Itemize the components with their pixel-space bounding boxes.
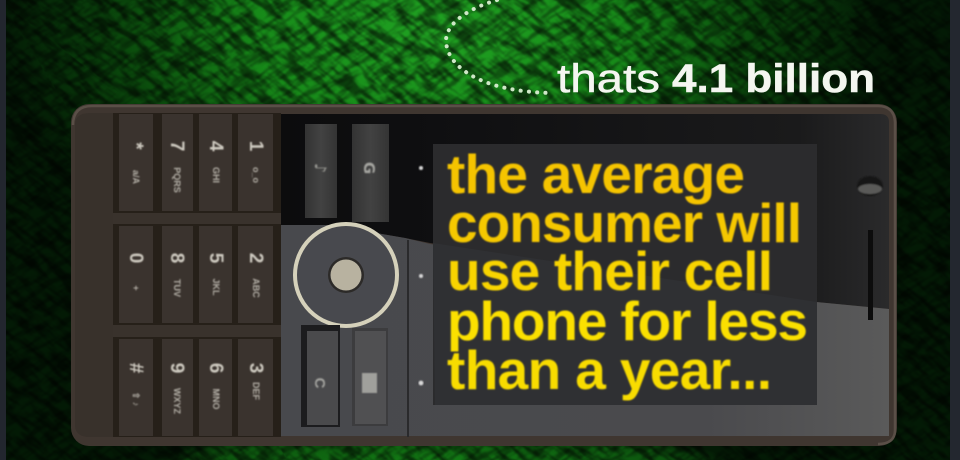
key digits: 8 (166, 253, 187, 263)
screen text: use their cell (447, 240, 773, 302)
side dots (419, 166, 423, 385)
soft key: end (352, 328, 388, 426)
key digits: 1 (245, 141, 266, 152)
key letters: ⇧ ♪ (131, 392, 141, 406)
soft key: clear (301, 325, 340, 427)
key letters: + (131, 285, 141, 291)
panel divider (407, 240, 409, 437)
key letters: PQRS (172, 167, 182, 193)
key digits (125, 141, 266, 374)
upper dark panel (281, 114, 889, 309)
key letters (131, 167, 261, 415)
keys row 1 (119, 114, 273, 211)
key digits: 5 (205, 253, 226, 264)
key letters: GHI (211, 167, 221, 183)
keys row 2 (119, 226, 273, 323)
soft key: call: ♪ (311, 163, 330, 173)
key digits: 6 (205, 363, 226, 373)
callout text: thats 4.1 billion: 4.1 billion (672, 57, 875, 101)
soft key: menu: G (360, 162, 378, 174)
soft key: clear: C (311, 378, 328, 389)
side slot (868, 230, 873, 320)
key digits: * (125, 142, 146, 150)
key digits: 4 (205, 141, 226, 152)
key digits: # (125, 363, 146, 374)
screen (433, 144, 817, 405)
key digits: 3 (245, 363, 266, 373)
frame edge: right (950, 0, 960, 460)
phone body (71, 104, 897, 446)
key letters: JKL (211, 278, 221, 296)
screen text (447, 143, 808, 401)
key letters: ABC (251, 278, 261, 298)
phone highlight edge (73, 106, 895, 444)
key digits: 9 (166, 363, 187, 373)
key letters: TUV (172, 279, 182, 297)
screen text: the average (447, 143, 745, 205)
keys row 3 (119, 339, 273, 436)
screen reflection (433, 243, 817, 405)
navigation ring (295, 224, 397, 326)
screen text: than a year... (447, 339, 772, 401)
dotted callout line (446, 0, 553, 93)
lower grey panel (281, 225, 889, 436)
key letters: DEF (251, 382, 261, 401)
screen text: phone for less (447, 290, 808, 352)
screen text: consumer will (447, 192, 802, 254)
soft key: menu (352, 124, 389, 222)
key digits: 7 (166, 141, 187, 151)
earpiece sensor (857, 176, 883, 196)
frame edge: left (0, 0, 6, 460)
soft key: call (305, 124, 337, 218)
key letters: a/A (131, 170, 141, 184)
callout text: thats 4.1 billion: thats (557, 57, 660, 101)
key letters: MNO (211, 388, 221, 410)
key digits: 2 (245, 253, 266, 263)
key letters: o_o (251, 167, 261, 183)
key digits: 0 (125, 253, 146, 263)
key letters: WXYZ (172, 388, 182, 415)
keypad panel (75, 113, 281, 437)
phone (71, 104, 897, 446)
